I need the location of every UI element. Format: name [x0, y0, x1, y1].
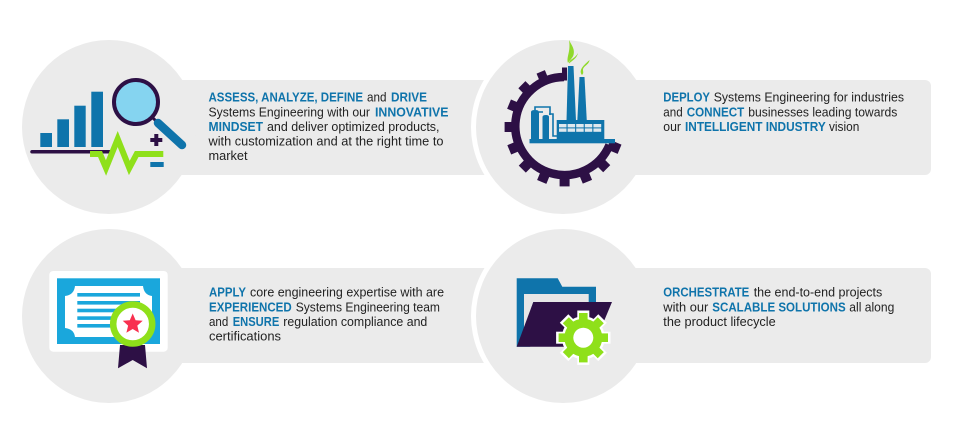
text: assess	[208, 90, 448, 163]
gear	[556, 310, 610, 365]
text: deploy	[663, 90, 904, 134]
panel: deploy	[471, 35, 931, 219]
text: orchestrate: the end-to-end projects	[754, 285, 883, 300]
icon: folder with gear	[517, 278, 612, 365]
icon: bar chart with magnifier and pulse	[32, 80, 182, 168]
text: apply: EXPERIENCED	[209, 301, 292, 315]
band: orchestrate	[563, 268, 931, 363]
circle: deploy	[476, 40, 650, 214]
text: apply: ENSURE	[233, 315, 279, 329]
panel: apply	[22, 229, 488, 403]
text: apply: certifications	[209, 329, 281, 344]
circle: apply	[22, 229, 196, 403]
text: assess: MINDSET	[208, 120, 263, 134]
icon: certificate	[49, 271, 168, 368]
smoke	[568, 40, 590, 75]
factory	[530, 66, 615, 143]
band: deploy	[563, 80, 931, 175]
text: assess: ASSESS, ANALYZE, DEFINE	[208, 91, 363, 105]
text: apply: regulation compliance and	[283, 314, 427, 329]
text: apply: core engineering expertise with are	[250, 285, 444, 300]
text: orchestrate: ORCHESTRATE	[663, 286, 749, 300]
text: deploy: businesses leading towards	[748, 105, 898, 120]
text: deploy: INTELLIGENT INDUSTRY	[685, 120, 826, 134]
text: assess: Systems Engineering with our	[208, 105, 371, 120]
panel: assess	[22, 40, 488, 214]
text: orchestrate: the product lifecycle	[663, 314, 776, 329]
text: assess: with customization and at the right time to	[208, 134, 444, 148]
text: apply: Systems Engineering team	[296, 300, 440, 315]
text: assess: market	[208, 148, 248, 163]
text: deploy: CONNECT	[687, 106, 745, 120]
text: deploy: vision	[829, 119, 859, 134]
gear arc	[505, 68, 621, 186]
text: deploy: and	[663, 105, 683, 120]
band: apply	[108, 268, 488, 363]
circle: orchestrate	[476, 229, 650, 403]
text: assess: DRIVE	[391, 91, 427, 105]
text: orchestrate	[662, 285, 894, 329]
text: assess: INNOVATIVE	[375, 106, 448, 120]
text: assess: and	[367, 90, 386, 105]
ring: orchestrate	[471, 224, 655, 408]
text: apply: and	[209, 314, 228, 329]
text: orchestrate: with our	[662, 300, 709, 315]
circle: assess	[22, 40, 196, 214]
text: orchestrate: SCALABLE SOLUTIONS	[712, 301, 846, 315]
band: assess	[108, 80, 488, 175]
text: apply: APPLY	[209, 286, 247, 300]
icon: factory in gear	[505, 40, 621, 186]
text: deploy: Systems Engineering for industries	[714, 90, 904, 105]
ring: deploy	[471, 35, 655, 219]
text: assess: and deliver optimized products,	[267, 119, 440, 134]
panel: orchestrate	[471, 224, 931, 408]
text: apply	[209, 285, 444, 344]
text: deploy: DEPLOY	[663, 91, 711, 105]
text: deploy: our	[663, 119, 682, 134]
text: orchestrate: all along	[849, 300, 894, 315]
